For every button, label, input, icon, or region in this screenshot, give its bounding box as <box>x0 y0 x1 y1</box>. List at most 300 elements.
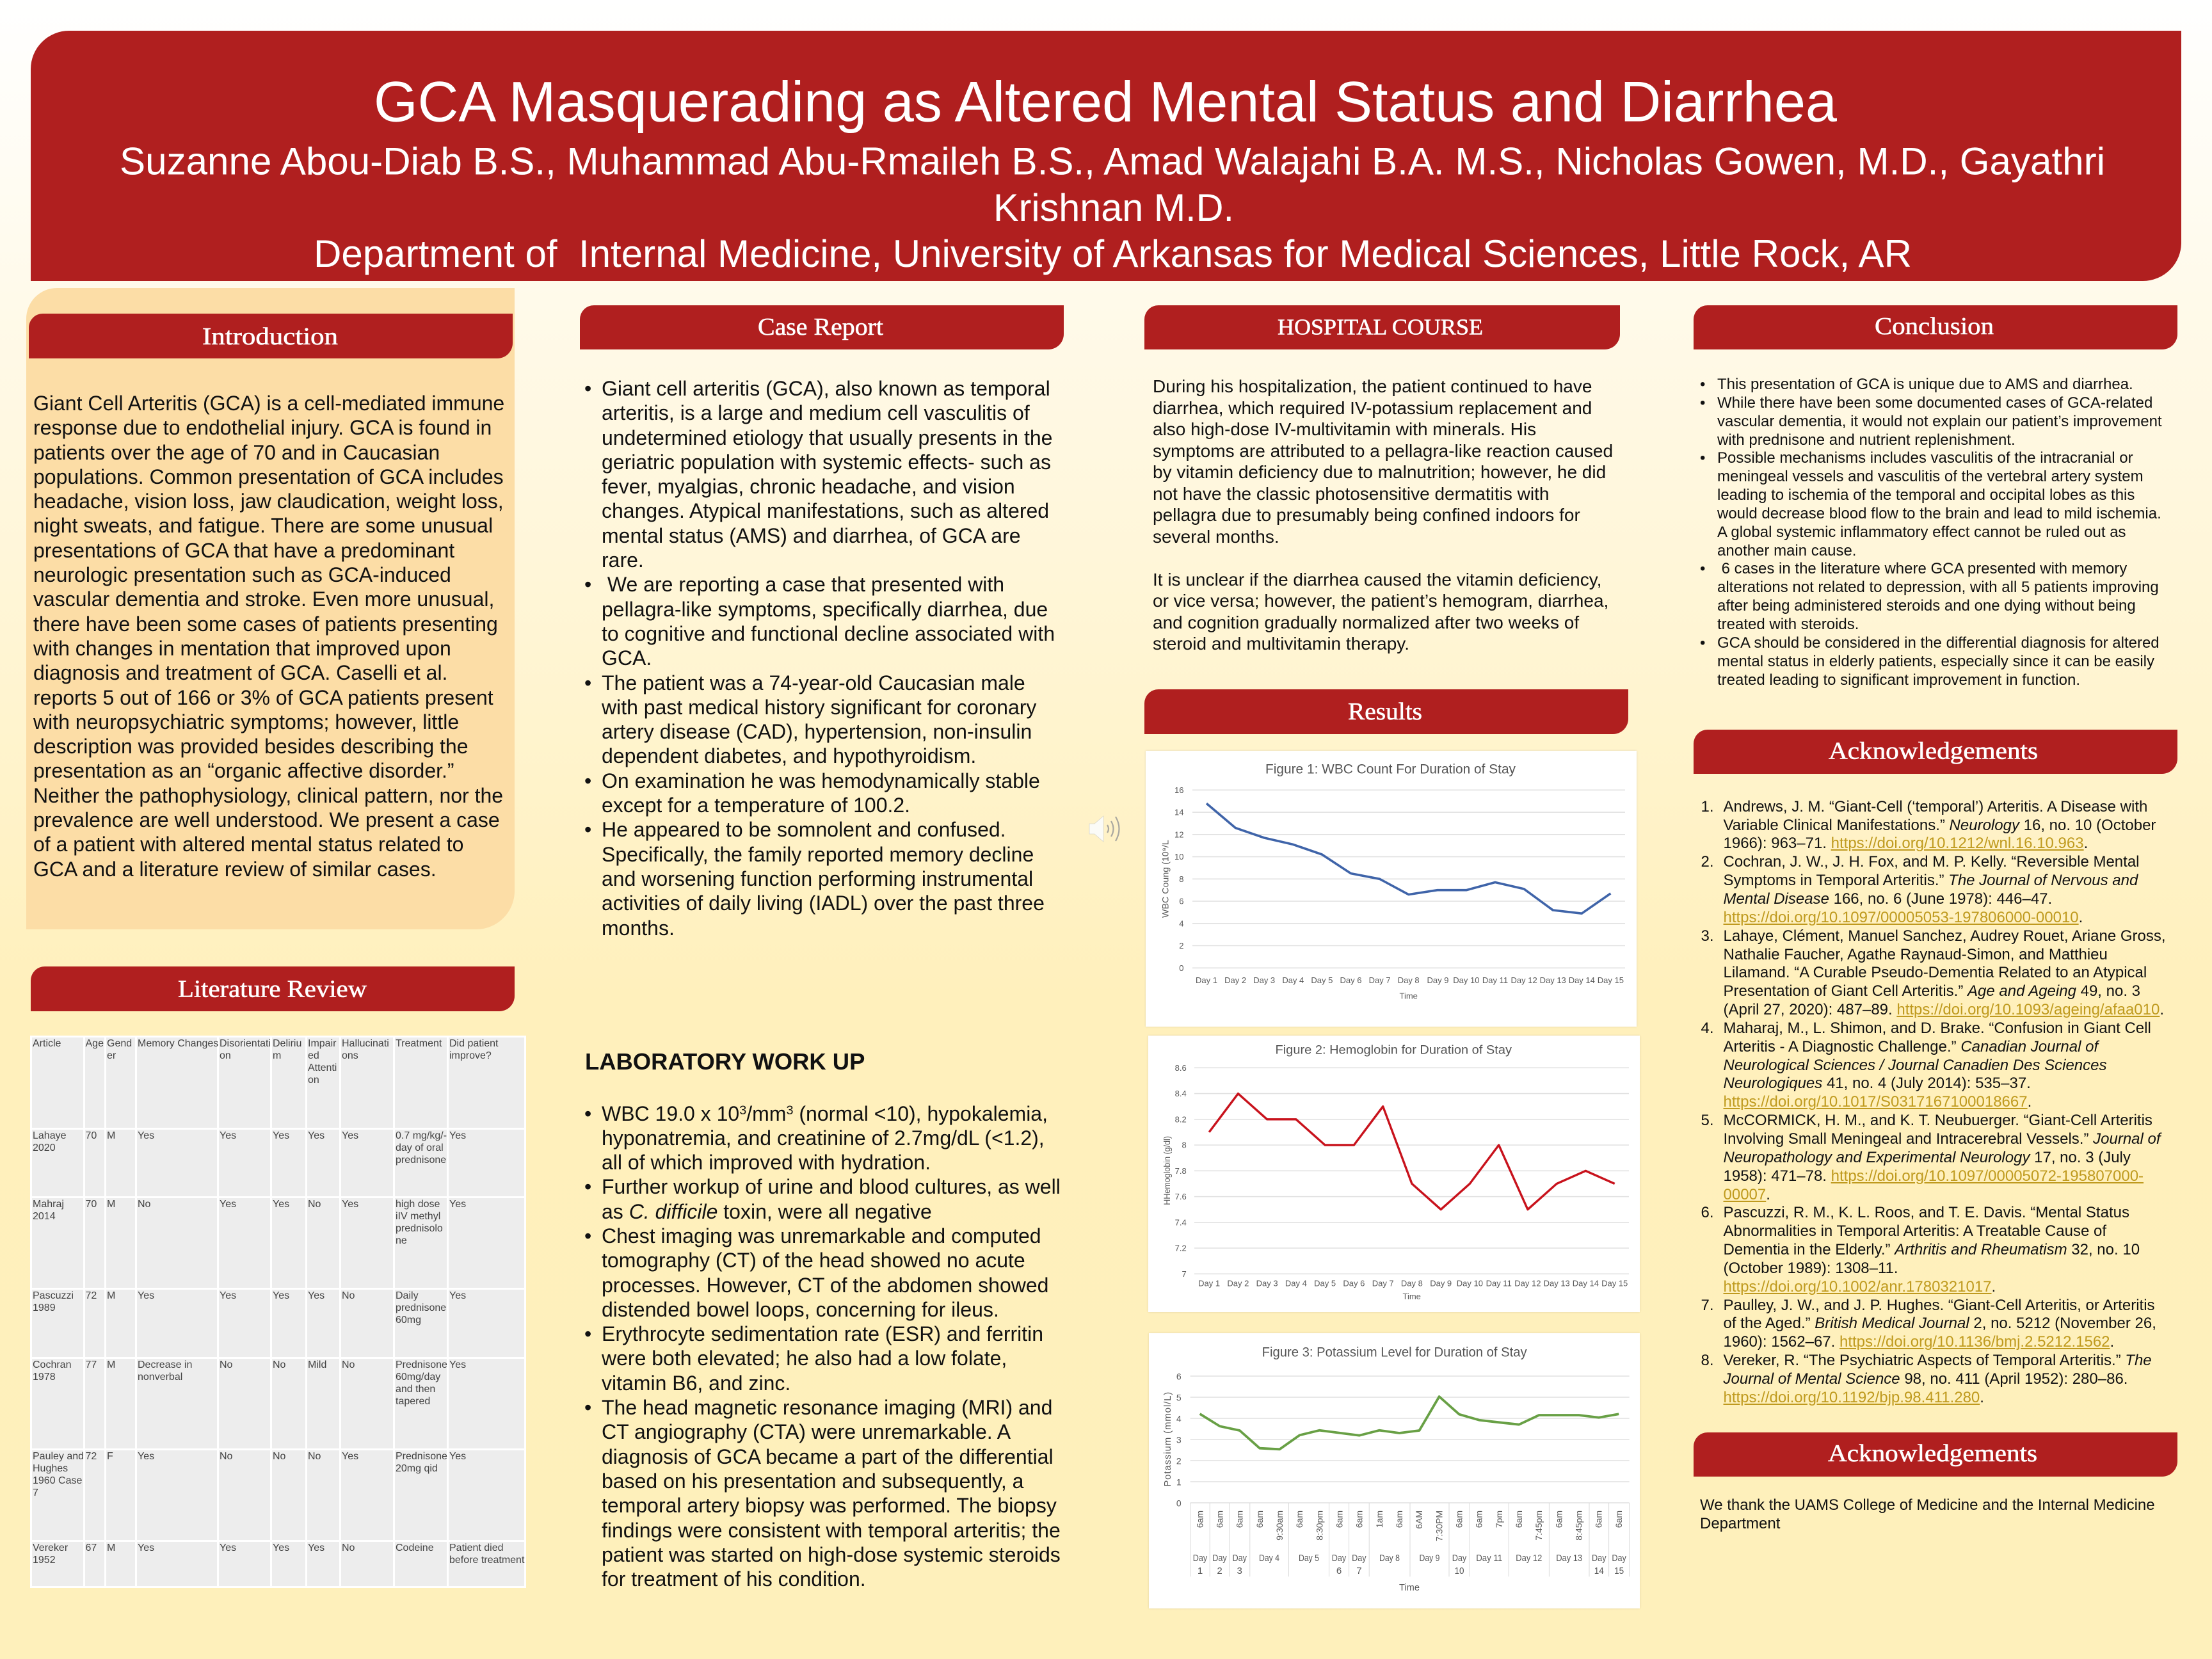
text: laboratory work up: processes. However, CT of the abdomen showed <box>602 1274 1048 1297</box>
text: reference list: Vereker, R. “The Psychiatric Aspects of Temporal Arteritis.” The <box>1723 1352 2152 1369</box>
text: case report: GCA. <box>602 646 652 669</box>
text: • <box>584 1396 591 1419</box>
text: reference list: Abnormalities in Temporal Arteritis: A Treatable Cause of <box>1723 1222 2106 1240</box>
heading: acknowledgements <box>1694 1432 2177 1477</box>
x axis time labels: 7:45pm <box>1534 1511 1544 1541</box>
text: laboratory work up: CT angiography (CTA) were unremarkable. A <box>602 1420 1011 1443</box>
text: case report: and worsening function performing instrumental <box>602 867 1033 890</box>
table: literature review: F <box>107 1451 113 1462</box>
table: literature review: Yes <box>308 1130 325 1141</box>
text: conclusion: GCA should be considered in the differential diagnosis for altered <box>1717 634 2160 652</box>
y axis and gridlines: 2 <box>1179 941 1184 950</box>
x axis labels: Day 6 <box>1340 975 1361 985</box>
y axis and gridlines: 7.2 <box>1175 1243 1187 1253</box>
text: introduction: night sweats, and fatigue. There are some unusual <box>33 514 493 537</box>
x axis day labels: Day 12 <box>1516 1553 1542 1564</box>
text: reference list: https://doi.org/10.1017/S0317167100018667. <box>1723 1093 2032 1110</box>
text: reference list: 00007. <box>1723 1186 1770 1203</box>
table: literature review: 2020 <box>33 1142 56 1153</box>
text: hospital course: also high-dose IV-multivitamin with minerals. His <box>1153 419 1536 439</box>
table: literature review: Yes <box>273 1130 289 1141</box>
heading: acknowledgements (references): Acknowledgements <box>1829 738 2038 765</box>
table: literature review: Yes <box>220 1199 236 1210</box>
y axis and gridlines: 5 <box>1176 1392 1182 1402</box>
text: introduction: with neuropsychiatric symptoms; however, little <box>33 710 459 733</box>
x axis time labels: 6am <box>1334 1511 1344 1528</box>
table: literature review: Article <box>33 1038 61 1049</box>
heading: hospital course: HOSPITAL COURSE <box>1278 315 1483 339</box>
text: hospital course: and cognition gradually normalized after two weeks of <box>1153 612 1579 632</box>
text: case report: mental status (AMS) and diarrhea, of GCA are <box>602 524 1021 547</box>
table: literature review: er <box>107 1050 116 1061</box>
x axis time labels: 8:30pm <box>1315 1511 1325 1541</box>
text: 8. <box>1701 1352 1714 1369</box>
y axis and gridlines: 8.6 <box>1175 1063 1187 1073</box>
table: literature review: Deliriu <box>273 1038 301 1049</box>
text: case report: arteritis, is a large and medium cell vasculitis of <box>602 401 1030 424</box>
chart title: Figure 2: Hemoglobin for Duration of Stay <box>1275 1044 1512 1057</box>
authors <box>120 140 2105 229</box>
table: literature review: on <box>308 1075 319 1086</box>
text: reference list: 1958): 471–78. https://doi.org/10.1097/00005072-195807000- <box>1723 1167 2144 1185</box>
table: literature review: No <box>220 1359 232 1370</box>
x axis labels: Day 9 <box>1430 1278 1452 1288</box>
x axis labels: Day 13 <box>1544 1278 1570 1288</box>
text: reference list: Neurological Sciences / Journal Canadien Des Sciences <box>1723 1057 2107 1074</box>
text: 2. <box>1701 853 1714 870</box>
x axis labels: Day 3 <box>1253 975 1275 985</box>
table: literature review: Yes <box>449 1130 466 1141</box>
text: case report: artery disease (CAD), hypertension, non-insulin <box>602 720 1032 743</box>
icon: speaker <box>1089 815 1120 842</box>
text: laboratory work up: for treatment of his condition. <box>602 1567 866 1591</box>
text: introduction: description was provided besides describing the <box>33 735 469 758</box>
table: literature review: Yes <box>273 1543 289 1553</box>
text: reference list: https://doi.org/10.1097/00005053-197806000-00010. <box>1723 909 2083 926</box>
y axis and gridlines: 4 <box>1179 918 1184 928</box>
y axis and gridlines: 7.8 <box>1175 1166 1187 1176</box>
x axis time labels: 6am <box>1194 1511 1205 1528</box>
x axis labels: Day 12 <box>1514 1278 1541 1288</box>
table: literature review: Yes <box>220 1290 236 1301</box>
table: literature review: Mahraj <box>33 1199 64 1210</box>
text: hospital course: During his hospitalization, the patient continued to have <box>1153 376 1592 396</box>
title: GCA Masquerading as Altered Mental Status and Diarrhea <box>374 69 1837 133</box>
x axis labels: Day 2 <box>1227 1278 1249 1288</box>
text: laboratory work up: based on his presentation and subsequently, a <box>602 1470 1023 1493</box>
text: reference list: Arteritis - A Diagnostic Challenge.” Canadian Journal of <box>1723 1038 2098 1055</box>
header banner <box>31 31 2181 281</box>
text: laboratory work up: WBC 19.0 x 103/mm3 (normal <10), hypokalemia, <box>602 1102 1048 1125</box>
x axis labels: Day 10 <box>1457 1278 1483 1288</box>
table: literature review: Lahaye <box>33 1130 67 1141</box>
x axis day labels: 2 <box>1217 1566 1222 1576</box>
table: literature review: Yes <box>220 1130 236 1141</box>
table: literature review: Patient died <box>449 1543 504 1553</box>
x axis day labels: 3 <box>1237 1566 1242 1576</box>
text: conclusion: treated with steroids. <box>1717 616 1859 633</box>
x axis time labels: 6am <box>1354 1511 1365 1528</box>
x axis day labels: Day <box>1212 1553 1227 1564</box>
text: conclusion: 6 cases in the literature where GCA presented with memory <box>1722 560 2127 577</box>
x axis labels: Day 1 <box>1198 1278 1220 1288</box>
table: literature review: No <box>273 1359 285 1370</box>
data line: WBC <box>1206 803 1610 913</box>
y axis and gridlines: 14 <box>1174 808 1184 817</box>
x axis time labels: 1am <box>1374 1511 1384 1528</box>
x axis day labels: Day 4 <box>1259 1553 1279 1564</box>
text: • <box>584 769 591 792</box>
x axis time labels: 7:30PM <box>1434 1511 1444 1541</box>
x axis time labels: 6am <box>1594 1511 1604 1528</box>
text: conclusion: This presentation of GCA is unique due to AMS and diarrhea. <box>1717 376 2133 393</box>
table: literature review: No <box>308 1451 321 1462</box>
heading: conclusion <box>1694 305 2177 349</box>
text: reference list: Neurologiques 41, no. 4 (July 2014): 535–37. <box>1723 1075 2031 1092</box>
table: literature review: Yes <box>273 1290 289 1301</box>
text: introduction: vascular dementia and stroke. Even more unusual, <box>33 588 494 611</box>
x axis labels: Day 10 <box>1453 975 1480 985</box>
text: introduction: headache, vision loss, jaw claudication, weight loss, <box>33 490 504 513</box>
text: hospital course: steroid and multivitamin therapy. <box>1153 634 1409 653</box>
text: • <box>1700 394 1705 412</box>
text: 1. <box>1701 798 1714 815</box>
text: • <box>1700 376 1705 393</box>
heading: results: Results <box>1348 698 1422 725</box>
text: laboratory work up <box>584 1102 1061 1591</box>
table: literature review: 72 <box>86 1290 97 1301</box>
x axis time labels: 6am <box>1394 1511 1404 1528</box>
x axis day labels: Day 9 <box>1420 1553 1440 1564</box>
text: reference list: Journal of Mental Science 98, no. 411 (April 1952): 280–86. <box>1723 1370 2128 1388</box>
text: laboratory work up: patient was started on high-dose systemic steroids <box>602 1543 1061 1566</box>
table: literature review: 60mg/day <box>396 1372 440 1382</box>
x axis day labels: 15 <box>1614 1566 1624 1576</box>
y axis and gridlines: HHemoglobin (g/dl) <box>1162 1136 1172 1205</box>
text: case report: Specifically, the family reported memory decline <box>602 843 1034 866</box>
x axis day labels: Day <box>1352 1553 1366 1564</box>
y axis and gridlines: 10 <box>1174 852 1184 862</box>
y axis and gridlines: 0 <box>1179 963 1184 973</box>
y axis and gridlines: Potassium (mmol/L) <box>1162 1392 1173 1487</box>
table: literature review: Daily <box>396 1290 419 1301</box>
data line: hemoglobin <box>1209 1094 1615 1210</box>
text: hospital course: several months. <box>1153 526 1279 547</box>
text: laboratory work up: vitamin B6, and zinc. <box>602 1372 790 1395</box>
table: literature review: Yes <box>342 1199 358 1210</box>
table: literature review: 1952 <box>33 1555 56 1566</box>
chart: figure 2 hemoglobin <box>1148 1036 1640 1312</box>
text: laboratory work up: tomography (CT) of the head showed no acute <box>602 1249 1025 1272</box>
x axis labels <box>1198 1278 1628 1301</box>
table: literature review: M <box>107 1290 115 1301</box>
heading: hospital course <box>1144 305 1620 349</box>
table: literature review: M <box>107 1130 115 1141</box>
text: conclusion: vascular dementia, it would not explain our patient’s improvement <box>1717 413 2162 430</box>
text: • <box>584 818 591 841</box>
text: reference list: Symptoms in Temporal Arteritis.” The Journal of Nervous and <box>1723 872 2138 889</box>
x axis day labels: Day <box>1612 1553 1626 1564</box>
y axis and gridlines: WBC Coung (10⁹/L <box>1160 840 1170 918</box>
x axis day labels: 10 <box>1454 1566 1464 1576</box>
x axis labels: Day 4 <box>1282 975 1304 985</box>
table: literature review: before treatment <box>449 1555 524 1566</box>
x axis day labels: Day 8 <box>1379 1553 1400 1564</box>
text: laboratory work up: Further workup of urine and blood cultures, as well <box>602 1175 1061 1198</box>
text: conclusion: mental status in elderly patients, especially since it can be easily <box>1717 653 2154 670</box>
data line: potassium <box>1200 1397 1619 1449</box>
text: laboratory work up: hyponatremia, and creatinine of 2.7mg/dL (<1.2), <box>602 1126 1045 1150</box>
y axis and gridlines: 7 <box>1182 1269 1187 1279</box>
table: literature review: No <box>273 1451 285 1462</box>
x axis labels: Day 1 <box>1196 975 1217 985</box>
heading: literature review: Literature Review <box>178 975 367 1002</box>
text: conclusion: While there have been some documented cases of GCA-related <box>1717 394 2152 412</box>
text: case report: dependent diabetes, and hypothyroidism. <box>602 744 976 767</box>
text: case report: fever, myalgias, chronic headache, and vision <box>602 475 1015 498</box>
x axis day labels: 7 <box>1356 1566 1362 1576</box>
table: literature review: Yes <box>342 1130 358 1141</box>
table: literature review: day of oral <box>396 1142 444 1153</box>
text: case report: activities of daily living (IADL) over the past three <box>602 892 1045 915</box>
text: conclusion: treated leading to significant improvement in function. <box>1717 671 2080 689</box>
table: literature review: on <box>220 1050 231 1061</box>
x axis labels: Day 13 <box>1540 975 1566 985</box>
text: introduction: presentation as an “organic affective disorder.” <box>33 759 454 782</box>
x axis labels: Day 7 <box>1372 1278 1394 1288</box>
table: literature review: Prednisone <box>396 1359 447 1370</box>
table: literature review: tapered <box>396 1396 430 1407</box>
text: introduction: GCA and a literature review of similar cases. <box>33 858 437 881</box>
x axis labels: Day 5 <box>1314 1278 1336 1288</box>
x axis time labels: 6am <box>1473 1511 1484 1528</box>
table: literature review: Yes <box>138 1451 154 1462</box>
x axis day labels: Day 11 <box>1476 1553 1502 1564</box>
x axis time labels: 7pm <box>1494 1511 1504 1528</box>
text: • <box>584 1102 591 1125</box>
x axis time labels: 6am <box>1254 1511 1265 1528</box>
table: literature review: Gend <box>107 1038 132 1049</box>
y axis and gridlines <box>1160 785 1625 973</box>
text: introduction: of a patient with altered mental status related to <box>33 833 463 856</box>
text: case report: geriatric population with systemic effects- such as <box>602 451 1051 474</box>
text: reference list: Dementia in the Elderly.” Arthritis and Rheumatism 32, no. 10 <box>1723 1241 2140 1258</box>
table: literature review: and then <box>396 1384 435 1395</box>
table: literature review: 77 <box>86 1359 97 1370</box>
table: literature review: Yes <box>308 1290 325 1301</box>
table: literature review: 72 <box>86 1451 97 1462</box>
table: literature review: nonverbal <box>138 1372 182 1382</box>
x axis labels: Day 3 <box>1256 1278 1278 1288</box>
text: case report: rare. <box>602 549 644 572</box>
table: literature review: m <box>273 1050 281 1061</box>
x axis day labels: Day <box>1332 1553 1347 1564</box>
text: conclusion <box>1700 376 2162 689</box>
text: 5. <box>1701 1112 1714 1129</box>
y axis and gridlines: 7.6 <box>1175 1192 1187 1201</box>
x axis labels: Day 12 <box>1511 975 1537 985</box>
x axis labels: Time <box>1402 1292 1421 1301</box>
chart title: Figure 1: WBC Count For Duration of Stay <box>1265 762 1516 776</box>
text: laboratory work up: findings were consistent with temporal arteritis; the <box>602 1519 1061 1542</box>
table: literature review: Yes <box>308 1543 325 1553</box>
table: literature review: Yes <box>449 1451 466 1462</box>
x axis day labels: Time <box>1399 1582 1420 1593</box>
table: literature review: No <box>342 1359 355 1370</box>
table: literature review: 60mg <box>396 1315 421 1325</box>
table: literature review: Age <box>86 1038 104 1049</box>
text: • <box>584 671 591 694</box>
table: literature review: 1960 Case <box>33 1475 82 1486</box>
text: reference list: of the Aged.” British Medical Journal 2, no. 5212 (November 26, <box>1723 1315 2156 1332</box>
table: literature review: 20mg qid <box>396 1463 438 1474</box>
table: literature review: 2014 <box>33 1211 56 1222</box>
y axis and gridlines: 4 <box>1176 1413 1182 1423</box>
table: literature review: Yes <box>138 1130 154 1141</box>
heading: introduction: Introduction <box>202 323 338 350</box>
x axis time labels: 8:45pm <box>1573 1511 1583 1541</box>
table: literature review: Attenti <box>308 1062 337 1073</box>
text: reference list: Paulley, J. W., and J. P. Hughes. “Giant-Cell Arteritis, or Arteritis <box>1723 1297 2155 1314</box>
heading: laboratory work up: LABORATORY WORK UP <box>585 1048 865 1075</box>
heading: acknowledgements (references) <box>1694 730 2177 774</box>
x axis labels: Day 5 <box>1311 975 1333 985</box>
table: literature review: M <box>107 1199 115 1210</box>
x axis day labels: Day <box>1232 1553 1247 1564</box>
table: literature review: Yes <box>449 1199 466 1210</box>
text: acknowledgements: We thank the UAMS College of Medicine and the Internal Medicine <box>1700 1496 2155 1514</box>
heading: acknowledgements: Acknowledgements <box>1828 1440 2037 1467</box>
text: reference list: 1966): 963–71. https://doi.org/10.1212/wnl.16.10.963. <box>1723 835 2088 852</box>
heading: case report <box>580 305 1064 349</box>
text: • <box>1700 449 1705 467</box>
text: conclusion: meningeal vessels and vasculitis of the vertebral artery system <box>1717 468 2144 485</box>
y axis and gridlines: 7.4 <box>1175 1217 1187 1227</box>
y axis and gridlines: 8.2 <box>1175 1114 1187 1124</box>
chart title: Figure 3: Potassium Level for Duration of Stay <box>1262 1345 1527 1359</box>
x axis labels: Day 7 <box>1369 975 1391 985</box>
x axis labels: Day 8 <box>1398 975 1420 985</box>
authors: Suzanne Abou-Diab B.S., Muhammad Abu-Rmaileh B.S., Amad Walajahi B.A. M.S., Nicholas Gowen, M.D., Gayathri <box>120 140 2105 183</box>
chart: figure 3 potassium <box>1149 1333 1640 1608</box>
text: 4. <box>1701 1020 1714 1037</box>
text: introduction: neurologic presentation such as GCA-induced <box>33 563 451 586</box>
x axis time labels: 6am <box>1514 1511 1524 1528</box>
x axis day labels: Day <box>1193 1553 1208 1564</box>
text: conclusion: would decrease blood flow to the brain and lead to mild ischemia. <box>1717 505 2161 522</box>
authors: Krishnan M.D. <box>993 186 1234 229</box>
text: hospital course: or vice versa; however, the patient’s hemogram, diarrhea, <box>1153 591 1608 611</box>
x axis day labels: Day <box>1592 1553 1607 1564</box>
text: laboratory work up: Erythrocyte sedimentation rate (ESR) and ferritin <box>602 1322 1043 1345</box>
table: literature review: prednisolo <box>396 1223 443 1234</box>
heading: conclusion: Conclusion <box>1875 313 1994 340</box>
text: laboratory work up: Chest imaging was unremarkable and computed <box>602 1224 1041 1247</box>
text: conclusion: leading to ischemia of the temporal and occipital lobes as this <box>1717 486 2135 504</box>
table: literature review: Yes <box>273 1199 289 1210</box>
text: • <box>584 377 591 400</box>
table: literature review: 1989 <box>33 1302 56 1313</box>
table: literature review: Codeine <box>396 1543 434 1553</box>
x axis time labels: 6am <box>1215 1511 1225 1528</box>
text: introduction: prevalence are well understood. We present a case <box>33 808 500 831</box>
x axis labels: Day 6 <box>1343 1278 1365 1288</box>
table: literature review <box>30 1036 526 1588</box>
text: laboratory work up: diagnosis of GCA became a part of the differential <box>602 1445 1054 1468</box>
text: conclusion: A global systemic inflammatory effect cannot be ruled out as <box>1717 524 2126 541</box>
table: literature review: prednisone <box>396 1155 446 1165</box>
text: introduction: there have been some cases of patients presenting <box>33 613 498 636</box>
x axis dividers <box>1190 1503 1630 1576</box>
text: reference list: Involving Small Meningeal and Intracerebral Vessels.” Journal of <box>1723 1130 2161 1148</box>
x axis day labels: 1 <box>1198 1566 1203 1576</box>
text: reference list: (April 27, 2020): 487–89. https://doi.org/10.1093/ageing/afaa010. <box>1723 1001 2164 1018</box>
text: reference list: Pascuzzi, R. M., K. L. Roos, and T. E. Davis. “Mental Status <box>1723 1204 2129 1221</box>
x axis time labels <box>1194 1511 1624 1541</box>
table: literature review: ons <box>342 1050 358 1061</box>
table: literature review: Yes <box>138 1543 154 1553</box>
y axis and gridlines <box>1162 1063 1629 1279</box>
text: reference list: https://doi.org/10.1192/bjp.98.411.280. <box>1723 1389 1984 1406</box>
text: reference list: 1960): 1562–67. https://doi.org/10.1136/bmj.2.5212.1562. <box>1723 1333 2114 1350</box>
text: case report: to cognitive and functional decline associated with <box>602 622 1055 645</box>
table: literature review: Disorientati <box>220 1038 271 1049</box>
y axis and gridlines: 3 <box>1176 1434 1182 1445</box>
x axis day labels: Day <box>1452 1553 1467 1564</box>
x axis labels: Day 4 <box>1285 1278 1307 1288</box>
heading: introduction <box>29 314 513 358</box>
text: conclusion: after being administered steroids and one dying without being <box>1717 597 2136 614</box>
text: hospital course: It is unclear if the diarrhea caused the vitamin deficiency, <box>1153 570 1601 589</box>
table: literature review: No <box>308 1199 321 1210</box>
text: introduction: patients over the age of 70 and in Caucasian <box>33 441 440 464</box>
text: introduction: Neither the pathophysiology, clinical pattern, nor the <box>33 784 503 807</box>
text: case report <box>584 377 1055 940</box>
y axis and gridlines: 16 <box>1174 785 1184 795</box>
text: introduction <box>33 392 504 881</box>
text: case report: pellagra-like symptoms, specifically diarrhea, due <box>602 598 1048 621</box>
table: literature review: M <box>107 1359 115 1370</box>
table: literature review: No <box>220 1451 232 1462</box>
table: literature review: Treatment <box>396 1038 442 1049</box>
text: 6. <box>1701 1204 1714 1221</box>
panel: introduction <box>26 288 515 929</box>
table: literature review: Memory Changes <box>138 1038 218 1049</box>
text: reference list: Lahaye, Clément, Manuel Sanchez, Audrey Rouet, Ariane Gross, <box>1723 927 2166 945</box>
text: • <box>584 573 591 596</box>
x axis time labels: 9:30am <box>1274 1511 1285 1541</box>
text: conclusion: with prednisone and nutrient replenishment. <box>1717 431 2016 449</box>
y axis and gridlines: 8 <box>1182 1141 1187 1150</box>
table: literature review: Decrease in <box>138 1359 192 1370</box>
x axis day labels: 14 <box>1594 1566 1604 1576</box>
table: literature review: Did patient <box>449 1038 498 1049</box>
text: case report: Giant cell arteritis (GCA), also known as temporal <box>602 377 1050 400</box>
text: laboratory work up: all of which improved with hydration. <box>602 1151 931 1174</box>
table: literature review: Hughes <box>33 1463 68 1474</box>
text: hospital course: symptoms are attributed to a pellagra-like reaction caused <box>1153 440 1613 461</box>
table: literature review: Hallucinati <box>342 1038 389 1049</box>
text: case report: changes. Atypical manifestations, such as altered <box>602 499 1049 522</box>
y axis and gridlines: 6 <box>1176 1371 1182 1381</box>
department: Department of Internal Medicine, University of Arkansas for Medical Sciences, Little Rock, AR <box>314 232 1912 275</box>
x axis labels: Day 2 <box>1224 975 1246 985</box>
table: literature review: No <box>342 1290 355 1301</box>
text: case report: On examination he was hemodynamically stable <box>602 769 1040 792</box>
text: hospital course: not have the classic photosensitive dermatitis with <box>1153 484 1549 503</box>
table: literature review: 1978 <box>33 1372 56 1382</box>
text: reference list: (October 1989): 1308–11. <box>1723 1260 1898 1277</box>
